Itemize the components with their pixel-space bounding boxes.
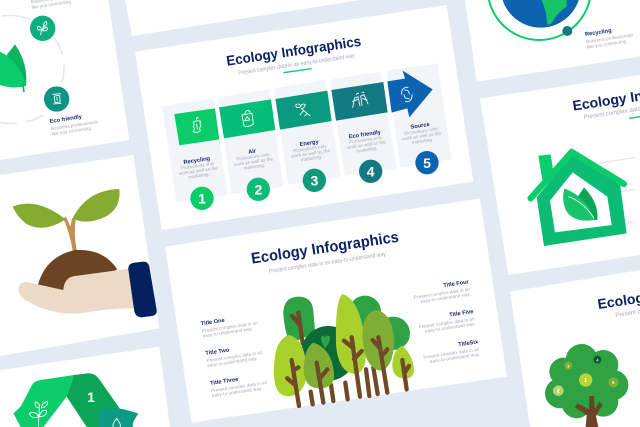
icon: navy cuff	[128, 262, 157, 317]
panel: five step arrow process	[135, 5, 473, 230]
orbit dot	[562, 26, 572, 36]
left labels	[200, 313, 269, 398]
left labels: Present complex data in an	[206, 350, 263, 363]
accent line	[629, 117, 640, 118]
step 5 card: 5	[423, 155, 431, 171]
step 3 card: Energy	[299, 139, 320, 148]
recycling caption: Recycling	[585, 28, 613, 38]
left labels: Title One	[200, 318, 225, 327]
recycle arrow: green	[13, 375, 74, 427]
step 4 card: Eco friendly	[348, 130, 382, 140]
legend rule lines	[598, 157, 635, 223]
step 1 card: 1	[198, 191, 206, 207]
right labels: Title Four	[443, 279, 470, 289]
left labels: Title Two	[205, 347, 230, 357]
subtitle: Present complex data in an easy-to-understand way	[238, 53, 355, 77]
right labels: Title Five	[449, 309, 474, 319]
step 2 card: marketing.	[243, 163, 266, 171]
icon: sprout	[29, 402, 47, 426]
subtitle: Present complex data in an easy-to-understand way	[269, 252, 386, 275]
step 2 card	[218, 89, 283, 201]
step 4 card: marketing.	[356, 146, 378, 154]
icon: tree: 5	[612, 380, 615, 385]
step 1 card: marketing.	[188, 172, 210, 180]
step 2 card: work as well as the	[234, 156, 274, 167]
left labels: easy-to-understand way.	[207, 356, 258, 368]
step 5 card: Source	[410, 122, 430, 131]
accent underline	[283, 69, 312, 73]
recycle arrow: dark green	[67, 373, 123, 427]
step 3 card: marketing.	[300, 154, 323, 162]
eco friendly text: Business professionals	[50, 119, 99, 131]
step 5 card: work as well as the	[402, 131, 442, 141]
step 5 card	[387, 63, 452, 174]
left labels: easy-to-understand way.	[202, 326, 253, 339]
right labels: Present complex data in an	[423, 347, 480, 360]
panel: house slide	[480, 75, 640, 275]
left labels: Title Three	[210, 377, 239, 387]
step 4 card	[330, 72, 397, 183]
step 2 card: 2	[254, 182, 262, 198]
eco friendly text: like you connecting.	[51, 126, 92, 137]
icon: tree: 2	[557, 389, 560, 395]
icon: leaf	[0, 44, 26, 92]
right labels: easy-to-understand way.	[420, 292, 471, 304]
icon: soil mound	[38, 250, 117, 293]
icon: water drop	[113, 418, 120, 427]
icon: hand	[18, 269, 134, 314]
panel: forest slide	[165, 198, 507, 423]
panel: globe slide	[465, 0, 640, 82]
step 3 card: Promotions only	[293, 143, 327, 153]
step 4 card: 4	[367, 164, 375, 180]
step 2 card: Promotions only	[236, 152, 270, 162]
left labels: Present complex data in an	[211, 380, 268, 393]
left labels: easy-to-understand way.	[212, 386, 262, 398]
number one: 1	[87, 389, 95, 405]
icon: seedling leaves and stem	[13, 189, 120, 251]
panel: recycle triangle slide	[0, 347, 170, 427]
panel: tree slide	[510, 270, 640, 427]
forest illustration	[274, 294, 414, 406]
icon: tree: 1	[584, 378, 587, 384]
eco friendly text: Eco friendly	[49, 114, 83, 125]
right labels: Present complex data in an	[414, 287, 471, 300]
panel: top centre slide fragment	[125, 0, 360, 36]
step 2 card: Air	[248, 148, 257, 156]
step 1 card: work as well as the	[178, 165, 219, 176]
step 5 card: marketing.	[411, 137, 434, 145]
dashed orbit ring	[0, 15, 64, 124]
icon: house	[531, 152, 627, 246]
panel: left circular diagram slide	[0, 0, 129, 160]
title: Ecology Infographics	[225, 33, 362, 69]
left labels: Present complex data in an	[201, 320, 258, 334]
recycle arrow: teal	[98, 407, 138, 427]
right labels: TitleSix	[458, 339, 479, 348]
step 4 card: Promotions only	[349, 135, 383, 145]
house illustration	[531, 152, 635, 246]
recycling caption: Business professionals	[586, 32, 634, 44]
eco friendly text	[49, 112, 100, 137]
icon: tree	[545, 344, 628, 427]
step 3 card	[274, 80, 341, 192]
step 5 card: Promotions only	[404, 126, 438, 136]
icon: tree: 3	[567, 363, 570, 368]
right labels	[413, 279, 481, 365]
step 3 card: work as well as the	[291, 148, 331, 159]
right labels: Present complex data in an	[418, 316, 475, 330]
recycling caption: like you connecting.	[587, 39, 628, 50]
recycling caption	[585, 25, 635, 50]
step 1 card	[162, 98, 228, 210]
orbit ring	[488, 0, 591, 40]
title: Ecology Infographics	[250, 229, 400, 268]
step 3 card: 3	[310, 173, 318, 189]
icon: globe	[501, 0, 581, 28]
right labels: easy-to-understand way.	[425, 321, 476, 334]
right labels: easy-to-understand way.	[429, 352, 480, 364]
panel: seedling in hand slide	[0, 155, 159, 356]
step 1 card: Promotions only	[181, 161, 215, 171]
icon: eco friendly badge	[44, 86, 69, 112]
icon: tree: 4	[596, 357, 599, 362]
step 4 card: work as well as the	[346, 139, 387, 150]
icon: plant badge	[30, 16, 55, 41]
step 1 card: Recycling	[183, 156, 211, 166]
